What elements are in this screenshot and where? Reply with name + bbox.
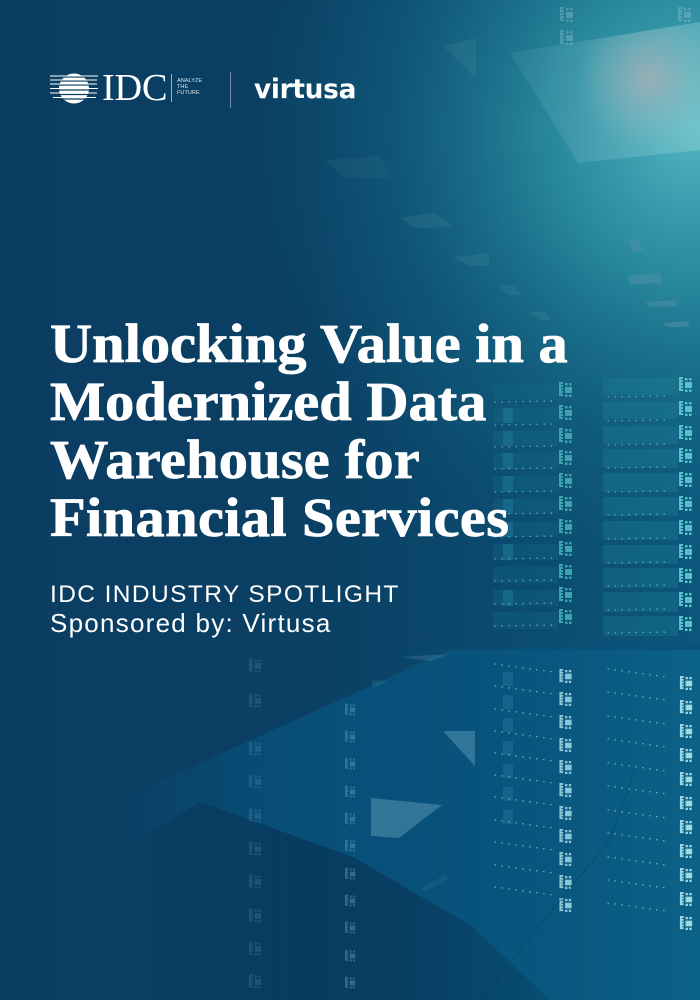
- logo: IDC: [50, 67, 202, 109]
- upper faint rack details: [490, 0, 691, 135]
- upper server racks: [493, 377, 692, 636]
- subtitle: spotlight and sponsor: IDC INDUSTRY SPOTLIGHT: [50, 581, 400, 608]
- ceiling tiles: [325, 38, 690, 327]
- logo divider: [230, 72, 231, 108]
- faint foreground racks: [249, 659, 635, 1000]
- floor lit band: [100, 645, 700, 1000]
- divider and tagline: analyze the future: FUTURE: [177, 90, 200, 96]
- icon: IDC striped globe: [50, 74, 98, 104]
- divider and tagline: analyze the future: ANALYZE: [177, 78, 202, 84]
- floor dark wedge: [100, 802, 550, 1000]
- ceiling light panel: [510, 22, 700, 163]
- subtitle: spotlight and sponsor: Sponsored by: Virtusa: [50, 608, 332, 638]
- title: Warehouse for: [50, 429, 420, 490]
- divider and tagline: analyze the future: [171, 74, 207, 102]
- title: [50, 313, 568, 548]
- divider and tagline: analyze the future: THE: [177, 84, 188, 90]
- title: Financial Services: [50, 487, 509, 548]
- wordmark: IDC: IDC: [102, 67, 167, 109]
- lower server racks: [495, 664, 692, 930]
- logo: Virtusa: virtusa: [254, 74, 356, 105]
- title: Modernized Data: [50, 371, 486, 432]
- floor tiles: [371, 654, 475, 892]
- subtitle: spotlight and sponsor: [50, 581, 400, 638]
- title: Unlocking Value in a: [50, 313, 568, 374]
